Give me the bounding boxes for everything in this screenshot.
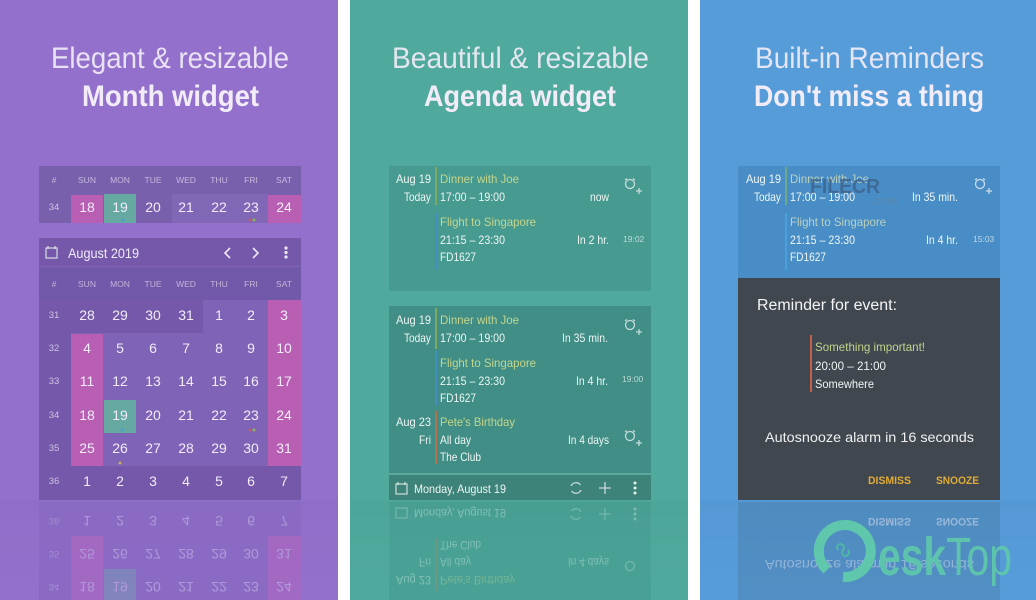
month calendar widget: 15: [211, 373, 227, 389]
agenda card: short: Today: [404, 190, 431, 204]
month calendar widget: 31: [178, 307, 194, 323]
agenda card: short: 17:00 – 19:00: [440, 190, 505, 204]
month calendar widget: 24: [276, 407, 292, 423]
watermark: DeskTop logo: [819, 525, 1012, 587]
agenda card behind dialog: Flight to Singapore: [790, 215, 886, 229]
month calendar widget: 32: [49, 343, 59, 354]
month calendar widget: 2: [247, 307, 255, 323]
week strip widget: THU: [210, 175, 228, 185]
week strip widget: SAT: [276, 175, 292, 185]
month calendar widget: 33: [49, 376, 59, 387]
agenda card: short: Flight to Singapore: [440, 215, 536, 229]
reflection: month widget: 1: [83, 513, 91, 529]
month calendar widget: FRI: [244, 279, 258, 289]
watermark: FILECR: [810, 176, 897, 207]
month calendar widget: 23: [243, 407, 259, 423]
agenda card behind dialog: 15:03: [973, 234, 995, 244]
reminder dialog: Somewhere: [815, 377, 874, 391]
month calendar widget: 20: [145, 407, 161, 423]
month calendar widget: 6: [149, 340, 157, 356]
month calendar widget: 12: [112, 373, 128, 389]
icon: alarm add: [625, 320, 642, 335]
icon: alarm add: [625, 430, 642, 446]
reflection: reminder dialog: SNOOZE: [936, 515, 979, 527]
icon: calendar: [46, 246, 57, 258]
agenda card behind dialog: [738, 166, 1000, 278]
reflection: month widget: 7: [280, 513, 288, 529]
month calendar widget: 5: [215, 473, 223, 489]
week strip widget: 22: [211, 199, 227, 215]
reflection: month widget: 3: [149, 513, 157, 529]
agenda card behind dialog: Aug 19: [746, 172, 781, 186]
heading: reminders: Don't miss a thing: [754, 80, 984, 113]
reflection: agenda widget: [389, 502, 651, 600]
week strip widget: [39, 166, 301, 223]
reminder dialog: Autosnooze alarm in 16 seconds: [765, 429, 974, 445]
reflection: agenda widget: Monday, August 19: [414, 506, 506, 520]
reflection: month widget: 5: [215, 513, 223, 529]
agenda card: full: Monday, August 19: [414, 482, 506, 496]
month calendar widget: 18: [79, 407, 95, 423]
month calendar widget: 7: [182, 340, 190, 356]
week strip widget: 19: [112, 199, 128, 215]
reflection: reminder dialog: DISMISS: [868, 515, 911, 527]
panel: month widget: [0, 0, 338, 600]
agenda card: full: 21:15 – 23:30: [440, 374, 505, 388]
agenda card: full: FD1627: [440, 391, 476, 405]
icon: sync: [571, 483, 581, 493]
agenda card behind dialog: In 4 hr.: [926, 233, 958, 247]
button: snooze: SNOOZE: [936, 475, 979, 487]
reflection: month widget: 18: [79, 579, 95, 595]
reflection: month widget: 23: [243, 579, 259, 595]
agenda card: short: 19:02: [623, 234, 645, 244]
reflection: agenda widget: The Club: [440, 538, 481, 552]
heading: agenda widget: [392, 42, 649, 113]
reminder dialog: 20:00 – 21:00: [815, 359, 886, 373]
month calendar widget: August 2019: [68, 245, 139, 261]
agenda card: short: [389, 166, 651, 291]
reflection: reminder dialog: [738, 502, 1000, 600]
week strip widget: FRI: [244, 175, 258, 185]
icon: calendar: [396, 482, 407, 494]
month calendar widget: 6: [247, 473, 255, 489]
month calendar widget: 3: [280, 307, 288, 323]
month calendar widget: 9: [247, 340, 255, 356]
week strip widget: TUE: [144, 175, 162, 185]
agenda card: full: Dinner with Joe: [440, 313, 519, 327]
agenda card: full: All day: [440, 433, 471, 447]
agenda card: full: Flight to Singapore: [440, 356, 536, 370]
agenda card behind dialog: 21:15 – 23:30: [790, 233, 855, 247]
icon: menu dots: [284, 246, 288, 259]
month calendar widget: 31: [49, 310, 59, 321]
month calendar widget: 29: [112, 307, 128, 323]
reflection: month widget: 26: [112, 546, 128, 562]
month calendar widget: 10: [276, 340, 292, 356]
week strip widget: WED: [176, 175, 196, 185]
month calendar widget: 22: [211, 407, 227, 423]
icon: alarm add: [625, 178, 642, 194]
agenda card behind dialog: In 35 min.: [912, 190, 958, 204]
agenda card: short: 21:15 – 23:30: [440, 233, 505, 247]
reminder dialog: Something important!: [815, 340, 925, 354]
agenda card: full: In 4 hr.: [576, 374, 608, 388]
month calendar widget: 30: [243, 440, 259, 456]
agenda card: full: Fri: [419, 433, 431, 447]
month calendar widget: 21: [178, 407, 194, 423]
agenda card: full: The Club: [440, 450, 481, 464]
month calendar widget: 16: [243, 373, 259, 389]
month calendar widget: 36: [49, 476, 59, 487]
agenda card behind dialog: FD1627: [790, 250, 826, 264]
reflection: month widget: 28: [178, 546, 194, 562]
month calendar widget: 1: [83, 473, 91, 489]
reflection: month widget: 34: [49, 581, 59, 592]
month calendar widget: 7: [280, 473, 288, 489]
reflection: agenda widget: Aug 23: [396, 573, 431, 587]
month calendar widget: 2: [116, 473, 124, 489]
month calendar widget: 4: [83, 340, 91, 356]
week strip widget: 24: [276, 199, 292, 215]
watermark: DeskTop logo: eskTop: [878, 527, 1012, 587]
watermark: FILECR: FILECR: [810, 176, 881, 198]
agenda card: full: 17:00 – 19:00: [440, 331, 505, 345]
reflection: month widget: 24: [276, 579, 292, 595]
icon: plus: [599, 482, 611, 494]
month calendar widget: 13: [145, 373, 161, 389]
reflection: agenda widget: Fri: [419, 555, 431, 569]
month calendar widget: 27: [145, 440, 161, 456]
month calendar widget: SUN: [78, 279, 96, 289]
month calendar widget: [39, 238, 301, 500]
heading: reminders: [754, 42, 984, 113]
month calendar widget: WED: [176, 279, 196, 289]
reflection: agenda widget: Pete's Birthday: [440, 573, 515, 587]
month calendar widget: TUE: [144, 279, 162, 289]
month calendar widget: 30: [145, 307, 161, 323]
heading: month widget: [51, 42, 289, 113]
month calendar widget: MON: [110, 279, 130, 289]
agenda card: full: Aug 19: [396, 313, 431, 327]
heading: reminders: Built-in Reminders: [755, 42, 984, 75]
agenda card: full: Today: [404, 331, 431, 345]
month calendar widget: 26: [112, 440, 128, 456]
month calendar widget: 14: [178, 373, 194, 389]
icon: alarm add: [975, 178, 992, 194]
reminder dialog: [738, 278, 1000, 500]
month calendar widget: 4: [182, 473, 190, 489]
month calendar widget: 35: [49, 443, 59, 454]
month calendar widget: SAT: [276, 279, 292, 289]
reflection: agenda widget: All day: [440, 555, 471, 569]
reflection: agenda widget: In 4 days: [568, 555, 609, 569]
reflection: month widget: 22: [211, 579, 227, 595]
reflection: month widget: [49, 516, 301, 600]
agenda card: short: Aug 19: [396, 172, 431, 186]
agenda card behind dialog: 17:00 – 19:00: [790, 190, 855, 204]
month calendar widget: 29: [211, 440, 227, 456]
month calendar widget: 28: [79, 307, 95, 323]
heading: month widget: Month widget: [82, 80, 259, 113]
month calendar widget: 11: [80, 373, 94, 389]
reflection: month widget: 6: [247, 513, 255, 529]
month calendar widget: THU: [210, 279, 228, 289]
heading: month widget: Elegant & resizable: [51, 42, 289, 75]
month calendar widget: 17: [276, 373, 292, 389]
heading: agenda widget: Agenda widget: [424, 80, 616, 113]
week strip widget: 21: [178, 199, 194, 215]
reflection: month widget: 31: [276, 546, 292, 562]
week strip widget: 23: [243, 199, 259, 215]
agenda card behind dialog: Today: [754, 190, 781, 204]
reflection: month widget: 30: [243, 546, 259, 562]
panel: reminders: [700, 0, 1036, 600]
reflection: month widget: 35: [49, 548, 59, 559]
reflection: month widget: 21: [178, 579, 194, 595]
watermark: FILECR: .com: [871, 196, 897, 207]
reflection: month widget: 4: [182, 513, 190, 529]
month calendar widget: 19: [112, 407, 128, 423]
heading: agenda widget: Beautiful & resizable: [392, 42, 649, 75]
agenda card: short: In 2 hr.: [577, 233, 609, 247]
reflection: reminder dialog: Autosnooze alarm in 16 seconds: [765, 557, 974, 573]
month calendar widget: 25: [79, 440, 95, 456]
reflection: month widget: 25: [79, 546, 95, 562]
reflection: month widget: 36: [49, 515, 59, 526]
month calendar widget: 5: [116, 340, 124, 356]
week strip widget: 34: [49, 202, 59, 213]
agenda card: full: [389, 306, 651, 500]
week strip widget: SUN: [78, 175, 96, 185]
icon: previous and next arrows: [225, 248, 258, 258]
agenda card behind dialog: Dinner with Joe: [790, 172, 869, 186]
month calendar widget: 28: [178, 440, 194, 456]
week strip widget: #: [52, 175, 57, 185]
agenda card: short: FD1627: [440, 250, 476, 264]
week strip widget: 20: [145, 199, 161, 215]
reminder dialog: Reminder for event:: [757, 297, 897, 314]
reflection: month widget: 29: [211, 546, 227, 562]
month calendar widget: 31: [276, 440, 292, 456]
agenda card: short: now: [590, 190, 609, 204]
reflection: month widget: 20: [145, 579, 161, 595]
icon: menu dots: [634, 482, 636, 494]
month calendar widget: 8: [215, 340, 223, 356]
reflection: month widget: 19: [112, 579, 128, 595]
icon: logo ring: [819, 525, 871, 577]
agenda card: short: Dinner with Joe: [440, 172, 519, 186]
agenda card: full: 19:00: [622, 374, 644, 384]
month calendar widget: 3: [149, 473, 157, 489]
month calendar widget: #: [52, 279, 57, 289]
reflection: month widget: 27: [145, 546, 161, 562]
agenda card: full: Aug 23: [396, 415, 431, 429]
agenda card: full: In 4 days: [568, 433, 609, 447]
agenda card: full: Pete's Birthday: [440, 415, 515, 429]
agenda card: full: In 35 min.: [562, 331, 608, 345]
reflection: month widget: 2: [116, 513, 124, 529]
week strip widget: MON: [110, 175, 130, 185]
button: dismiss: DISMISS: [868, 475, 911, 487]
month calendar widget: 1: [215, 307, 223, 323]
month calendar widget: 34: [49, 410, 59, 421]
panel: agenda widget: [350, 0, 688, 600]
week strip widget: 18: [79, 199, 95, 215]
